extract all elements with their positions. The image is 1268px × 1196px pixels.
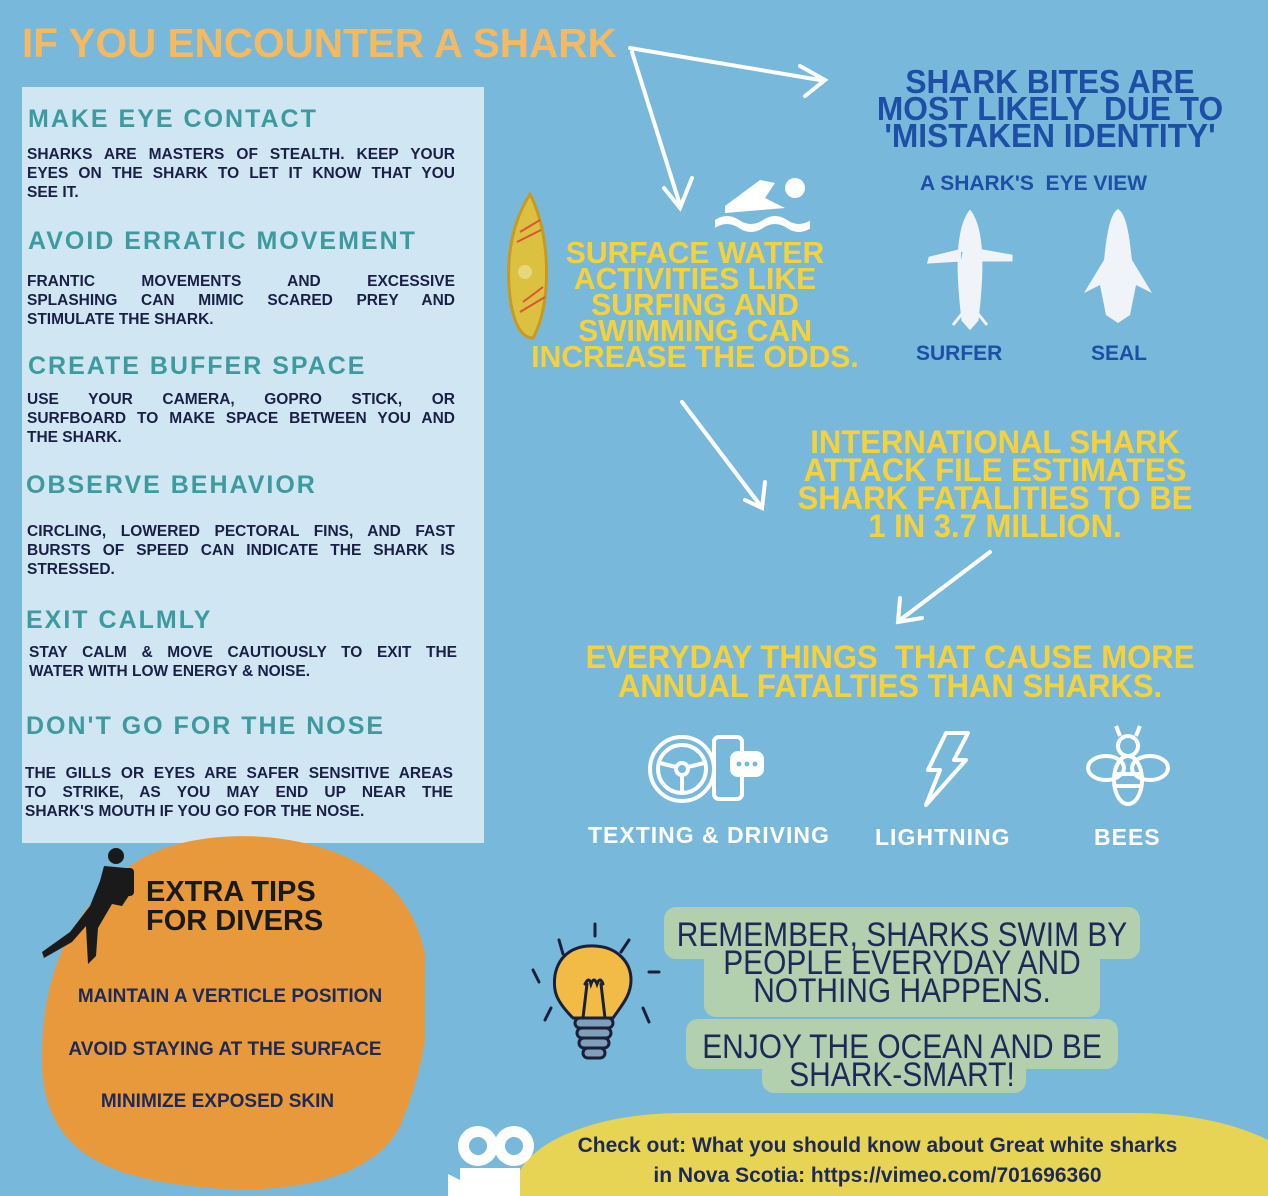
text: observe: BURSTS OF SPEED CAN INDICATE THE SHARK IS xyxy=(27,542,455,559)
text: observe: CIRCLING, LOWERED PECTORAL FINS, AND FAST xyxy=(27,523,455,540)
icon: surfboard xyxy=(507,192,548,340)
label: bees: BEES xyxy=(1094,824,1161,850)
text: enjoy xyxy=(702,1028,1102,1094)
callout: remember xyxy=(664,907,1140,1094)
text: fatalities: 1 IN 3.7 MILLION. xyxy=(868,508,1122,544)
text: link: in Nova Scotia: https://vimeo.com/701696360 xyxy=(653,1164,1102,1187)
label: texting: TEXTING & DRIVING xyxy=(588,822,830,848)
text: remember xyxy=(677,916,1127,1010)
text: fatalities: SHARK FATALITIES TO BE xyxy=(798,480,1192,516)
text: nose: TO STRIKE, AS YOU MAY END UP NEAR THE xyxy=(25,784,453,801)
heading: everyday things: ANNUAL FATALTIES THAN SHARKS. xyxy=(618,668,1162,704)
text: erratic xyxy=(27,273,455,328)
text: erratic: FRANTIC MOVEMENTS AND EXCESSIVE xyxy=(27,273,455,290)
heading: everyday things: EVERYDAY THINGS THAT CAUSE MORE xyxy=(586,639,1194,675)
icon: texting & driving xyxy=(648,735,764,803)
text: observe: STRESSED. xyxy=(27,561,115,578)
text: link: Check out: What you should know about Great white sharks xyxy=(578,1134,1177,1157)
text: diver tips: AVOID STAYING AT THE SURFACE xyxy=(68,1039,382,1060)
heading: extra tips: EXTRA TIPS xyxy=(146,876,316,908)
icon: light bulb xyxy=(531,922,660,1060)
text: eye contact: SEE IT. xyxy=(27,184,79,201)
text: eye contact: EYES ON THE SHARK TO LET IT KNOW THAT YOU xyxy=(27,165,455,182)
heading: exit: EXIT CALMLY xyxy=(26,606,212,634)
icon: camera xyxy=(448,1126,534,1196)
text: enjoy: SHARK-SMART! xyxy=(789,1056,1015,1094)
heading: mistaken identity: MOST LIKELY DUE TO xyxy=(877,90,1223,127)
text: diver tips: MAINTAIN A VERTICLE POSITION xyxy=(78,986,382,1007)
text: surface activities: SURFACE WATER xyxy=(566,235,824,270)
text: surface activities: INCREASE THE ODDS. xyxy=(531,339,859,374)
panel: tips xyxy=(22,87,484,843)
heading: nose: DON'T GO FOR THE NOSE xyxy=(26,712,385,740)
heading: buffer: CREATE BUFFER SPACE xyxy=(28,352,366,380)
text: nose xyxy=(25,765,453,820)
heading: erratic: AVOID ERRATIC MOVEMENT xyxy=(28,227,417,255)
text: observe xyxy=(27,523,455,578)
text: enjoy: ENJOY THE OCEAN AND BE xyxy=(702,1028,1102,1066)
label: seal: SEAL xyxy=(1091,342,1147,365)
text: eye view: A SHARK'S EYE VIEW xyxy=(920,172,1147,195)
label: lightning: LIGHTNING xyxy=(875,824,1010,850)
text: surface activities: SWIMMING CAN xyxy=(578,313,812,348)
panel: diver tips blob xyxy=(42,836,425,1190)
text: buffer: SURFBOARD TO MAKE SPACE BETWEEN YOU AND xyxy=(27,410,455,427)
text: exit: STAY CALM & MOVE CAUTIOUSLY TO EXIT THE xyxy=(29,644,457,661)
heading: mistaken identity xyxy=(877,63,1223,154)
text: remember: PEOPLE EVERYDAY AND xyxy=(723,944,1081,982)
text: remember: REMEMBER, SHARKS SWIM BY xyxy=(677,916,1127,954)
text: surface activities xyxy=(531,235,859,374)
text: diver tips xyxy=(68,986,382,1112)
text: exit: WATER WITH LOW ENERGY & NOISE. xyxy=(29,663,310,680)
text: link xyxy=(578,1134,1177,1187)
text: fatalities: INTERNATIONAL SHARK xyxy=(810,424,1180,460)
text: fatalities xyxy=(798,424,1192,544)
text: surface activities: ACTIVITIES LIKE xyxy=(574,261,816,296)
text: nose: SHARK'S MOUTH IF YOU GO FOR THE NOSE. xyxy=(25,803,364,820)
icon: seal silhouette xyxy=(1084,209,1152,323)
icon: swimmer xyxy=(715,178,810,232)
footer: video link xyxy=(515,1113,1268,1196)
label: surfer: SURFER xyxy=(916,342,1002,365)
heading: extra tips: FOR DIVERS xyxy=(146,905,323,937)
text: diver tips: MINIMIZE EXPOSED SKIN xyxy=(101,1091,334,1112)
heading: everyday things xyxy=(586,639,1194,704)
icon: diver xyxy=(42,848,134,964)
text: exit xyxy=(29,644,457,680)
heading: mistaken identity: SHARK BITES ARE xyxy=(905,63,1195,100)
text: erratic: STIMULATE THE SHARK. xyxy=(27,311,214,328)
text: buffer: THE SHARK. xyxy=(27,429,122,446)
heading: eye contact: MAKE EYE CONTACT xyxy=(28,105,318,133)
text: eye contact xyxy=(27,146,455,201)
text: surface activities: SURFING AND xyxy=(591,287,799,322)
icon: surfer silhouette xyxy=(927,210,1012,330)
text: eye contact: SHARKS ARE MASTERS OF STEALTH. KEEP YOUR xyxy=(27,146,455,163)
heading: mistaken identity: 'MISTAKEN IDENTITY' xyxy=(884,117,1216,154)
icon: lightning xyxy=(924,731,970,808)
text: remember: NOTHING HAPPENS. xyxy=(753,972,1051,1010)
text: buffer xyxy=(27,391,455,446)
title: IF YOU ENCOUNTER A SHARK xyxy=(22,20,617,66)
icon: bee xyxy=(1086,725,1170,806)
heading: observe: OBSERVE BEHAVIOR xyxy=(26,471,317,499)
heading: extra tips xyxy=(146,876,323,937)
text: erratic: SPLASHING CAN MIMIC SCARED PREY AND xyxy=(27,292,455,309)
text: fatalities: ATTACK FILE ESTIMATES xyxy=(804,452,1186,488)
text: nose: THE GILLS OR EYES ARE SAFER SENSITIVE AREAS xyxy=(25,765,453,782)
text: buffer: USE YOUR CAMERA, GOPRO STICK, OR xyxy=(27,391,455,408)
